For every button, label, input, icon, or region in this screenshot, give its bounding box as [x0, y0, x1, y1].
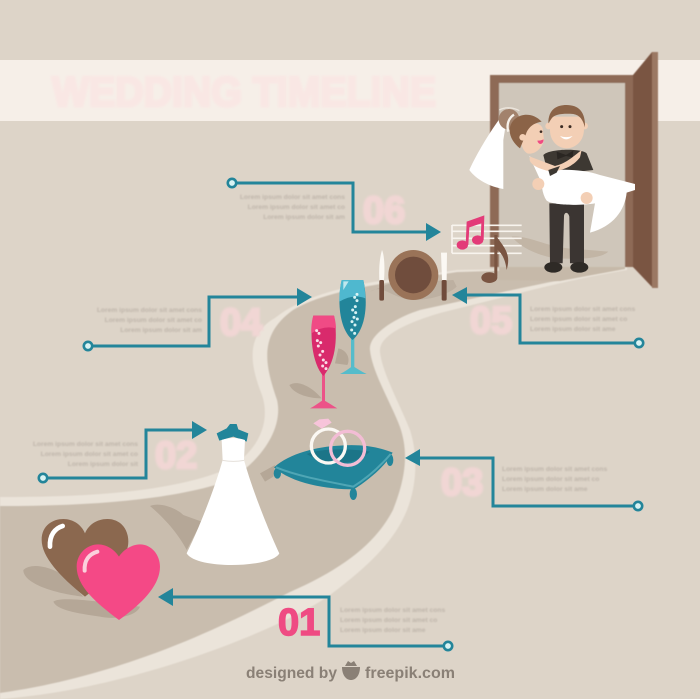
text block 02 — [33, 441, 139, 468]
footer credit: freepik.com — [365, 665, 455, 682]
champagne glasses — [289, 280, 367, 408]
number 03: 03 — [441, 462, 483, 504]
number 04: 04 — [220, 302, 262, 344]
brown note — [481, 235, 508, 283]
music staff — [452, 225, 522, 253]
step 03 — [405, 449, 642, 510]
connector 02 — [39, 421, 207, 482]
hearts — [23, 519, 160, 620]
connector 03 — [405, 449, 642, 510]
connector 05 — [452, 287, 643, 347]
fork — [441, 253, 447, 301]
text block 06: Lorem ipsum dolor sit amet cons — [240, 194, 345, 201]
text block 02: Lorem ipsum dolor sit amet co — [41, 451, 138, 458]
text block 04 — [97, 307, 202, 334]
place setting — [370, 250, 457, 301]
ring cushion — [260, 419, 393, 500]
text block 06: Lorem ipsum dolor sit amet co — [248, 204, 345, 211]
teal glass — [339, 280, 367, 374]
connector 01 — [158, 588, 452, 650]
text block 03: Lorem ipsum dolor sit amet co — [502, 476, 599, 483]
brown heart — [42, 519, 128, 597]
text block 04: Lorem ipsum dolor sit amet cons — [97, 307, 202, 314]
text block 01: Lorem ipsum dolor sit amet co — [340, 617, 437, 624]
text block 05: Lorem ipsum dolor sit amet cons — [530, 306, 635, 313]
text block 02: Lorem ipsum dolor sit amet cons — [33, 441, 138, 448]
text block 05 — [530, 306, 635, 333]
pink heart — [77, 544, 160, 620]
text block 01: Lorem ipsum dolor sit ame — [340, 627, 426, 634]
step 02 — [33, 421, 207, 482]
footer credit — [246, 661, 455, 682]
couple shadow — [512, 237, 608, 259]
text block 05: Lorem ipsum dolor sit amet co — [530, 316, 627, 323]
connector 04 — [84, 288, 312, 350]
pink glass — [310, 316, 337, 408]
icon: freepik logo — [342, 661, 360, 680]
text block 03: Lorem ipsum dolor sit amet cons — [502, 466, 607, 473]
connector 06 — [228, 179, 441, 241]
step 05 — [452, 287, 643, 347]
winding road — [0, 267, 627, 699]
bride — [469, 108, 635, 233]
text block 06: Lorem ipsum dolor sit am — [263, 214, 345, 221]
text block 01 — [340, 607, 445, 634]
text block 02: Lorem ipsum dolor sit — [68, 461, 139, 468]
number 05: 05 — [470, 300, 512, 342]
text block 01: Lorem ipsum dolor sit amet cons — [340, 607, 445, 614]
groom — [543, 105, 593, 273]
couple: groom carrying bride — [469, 105, 635, 273]
plate — [388, 250, 438, 300]
pink notes — [457, 215, 484, 250]
door — [490, 52, 658, 288]
wedding rings — [311, 419, 365, 465]
music notes — [452, 215, 522, 283]
cushion — [274, 445, 393, 500]
footer credit: designed by — [246, 665, 337, 682]
wedding dress — [150, 424, 279, 565]
knife — [379, 250, 384, 301]
text block 04: Lorem ipsum dolor sit am — [120, 327, 202, 334]
title: WEDDING TIMELINE — [52, 68, 436, 115]
text block 06 — [240, 194, 345, 221]
top banner — [0, 60, 700, 121]
step 06 — [228, 179, 441, 241]
text block 04: Lorem ipsum dolor sit amet co — [105, 317, 202, 324]
text block 03 — [502, 466, 607, 493]
number 01: 01 — [278, 602, 320, 644]
step 04 — [84, 288, 312, 350]
text block 05: Lorem ipsum dolor sit ame — [530, 326, 616, 333]
number 06: 06 — [363, 190, 405, 232]
number 02: 02 — [155, 435, 197, 477]
text block 03: Lorem ipsum dolor sit ame — [502, 486, 588, 493]
step 01 — [158, 588, 452, 650]
